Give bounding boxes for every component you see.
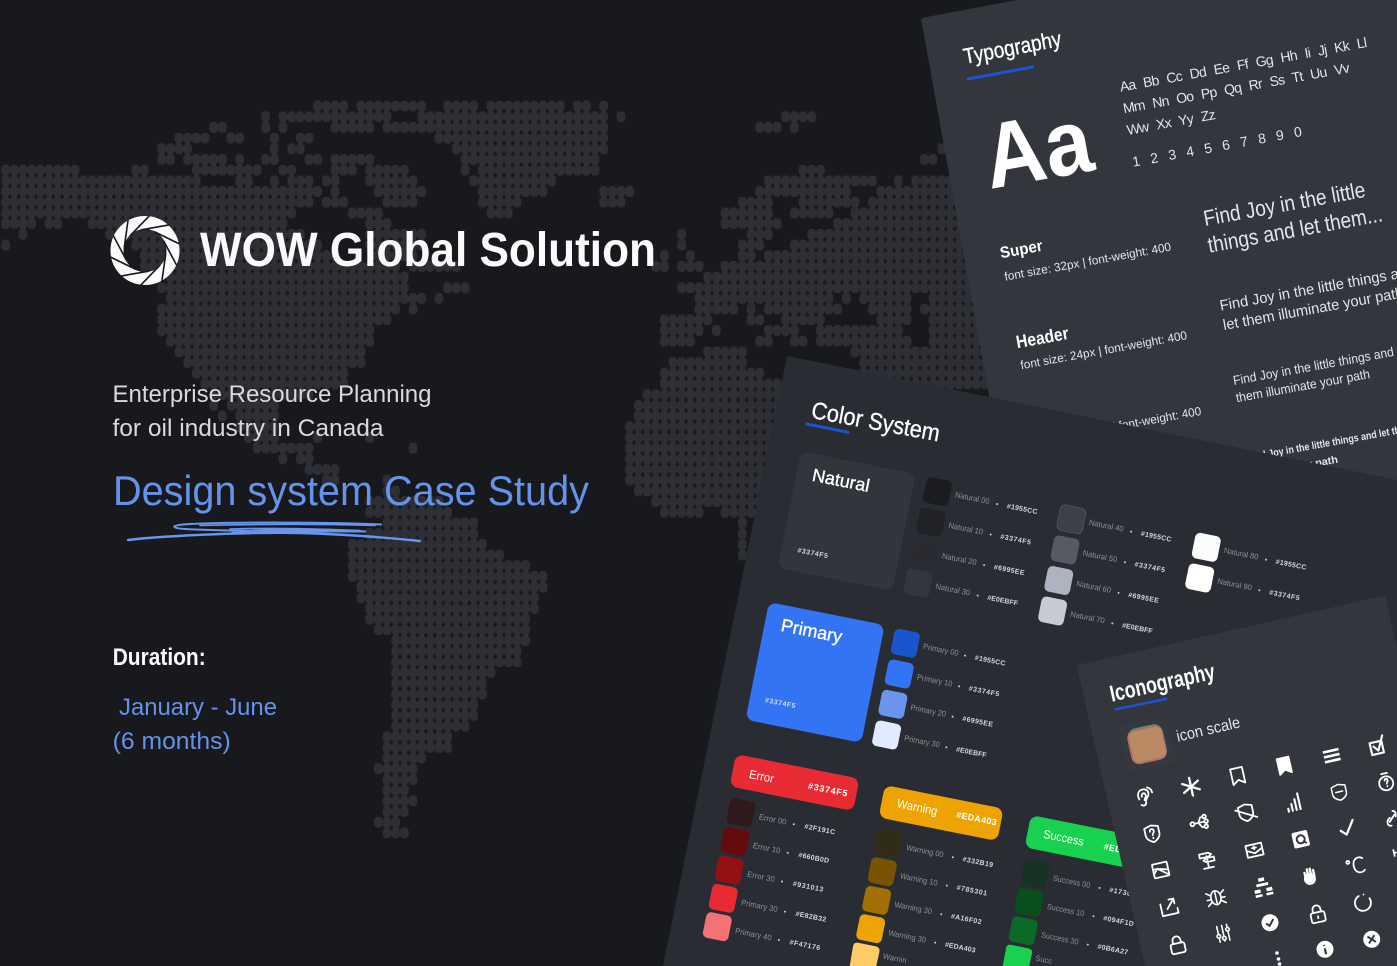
swatch: success 30 [1008,915,1131,964]
swatch: success 40 (cut by frame) [1003,945,1053,966]
swatch: natural 10: Natural 10 [948,521,984,537]
card: natural: Natural [811,465,871,496]
swatch: success 40 (cut by frame): Succ [1035,954,1053,966]
swatch: natural 90: Natural 90 [1217,577,1253,592]
swatch: natural 10: #3374F5 [1000,534,1032,547]
icon: lock [1169,935,1186,955]
swatch: warning 40 (cut by frame): Warnin [882,952,907,965]
swatch: success 10: Success 10 [1046,902,1086,918]
swatch: natural 40 [1056,504,1174,552]
sample text: small [1235,422,1397,484]
swatch: warning 10: Warning 10 [899,871,939,888]
icon: checkbox [1368,735,1386,755]
sample text: super: Find Joy in the little [1201,177,1367,231]
card: success: Success [1042,827,1085,849]
swatch: natural 40: Natural 40 [1088,518,1125,534]
card: error: #3374F5 [807,781,848,798]
swatch: error 10 [720,826,832,873]
icon: celsius [1346,857,1365,875]
icon: image [1152,862,1170,878]
icon scale swatch [1119,715,1176,773]
icon: link [1385,810,1397,826]
icon: bug [1206,889,1226,906]
swatch: warning 30 bright: #EDA403 [944,942,976,955]
subtitle: project description [112,381,432,442]
swatch: natural 60 [1044,565,1162,613]
swatch: natural 30: Natural 30 [935,582,971,598]
swatch: natural 70: Natural 70 [1069,610,1106,625]
swatch: success 30: #0B6A27 [1097,944,1129,957]
swatch: error 10: #660B0D [798,852,830,865]
icon: Q square [1291,830,1310,849]
alphabet specimen [1118,34,1368,170]
panel: color system [663,356,1397,966]
swatch: primary 00: #1955CC [974,655,1006,668]
swatch: warning 30: #A16F02 [950,913,982,926]
swatch: natural 60: #6995EE [1128,592,1160,605]
icon: keyed lock [1309,904,1326,924]
swatch: warning 30 [861,885,984,934]
duration value: January - June [119,694,277,721]
swatch: primary 10: #3374F5 [968,685,1000,698]
sample text: title [1232,344,1395,405]
panel: iconography [1077,596,1397,966]
scribble underline [128,523,420,541]
icon: close circle [1362,929,1382,949]
swatch: natural 20 [909,537,1027,585]
swatch: primary 30 red [708,883,829,932]
subtitle: project description: Enterprise Resource Planning [112,381,432,408]
card: warning: Warning [896,796,939,818]
title: company name: WOW Global Solution [200,224,656,277]
icon: menu lines [1323,749,1341,762]
icon: spinner [1353,893,1372,912]
swatch: primary 20: #6995EE [962,716,994,729]
swatch: natural 80: #1955CC [1275,559,1307,572]
swatch: primary 30 red: #E82B32 [795,911,827,924]
swatch: natural 00: Natural 00 [954,490,991,506]
swatch: primary 40 red: Primary 40 [734,926,773,943]
card: warning [879,785,1004,841]
icon: vertical dots [1275,951,1281,966]
icon: hand [1302,868,1317,886]
swatch: warning 30 bright: Warning 30 [888,928,927,945]
swatch: success 00 [1020,859,1143,908]
swatch: warning 30 bright [855,913,978,962]
card: warning: #EDA403 [955,810,998,827]
swatch: warning 30: Warning 30 [894,900,933,916]
icon: bookmark filled [1277,757,1292,775]
heading: typography: Typography [961,26,1063,69]
swatch: warning 10 [867,856,990,905]
icon scale label: icon scale [1175,714,1242,746]
swatch: primary 30: #E0EBFF [955,746,988,760]
swatch: error 00 [726,797,838,844]
swatch: primary 40 red: #F47176 [789,939,821,952]
sample text: small: illuminate your path [1235,454,1339,484]
card: error [730,754,860,811]
swatch: natural 10 [916,507,1034,555]
heading: design system case study: Design system Case Study [113,467,589,514]
card: primary: Primary [779,615,844,647]
swatch: natural 60: Natural 60 [1076,579,1112,595]
swatch: primary 30 red: Primary 30 [740,898,779,914]
style: title (partly hidden): font size: 16px | font-weight: 400 [1034,404,1203,448]
swatch: success 10: #094F1D [1103,915,1134,928]
swatch: natural 20: Natural 20 [941,551,978,567]
icon: signpost [1199,852,1216,869]
swatch: error 30: #931013 [792,881,824,894]
swatch: warning 00: #332B19 [962,856,994,869]
icon: asterisk [1181,776,1201,797]
heading underline [807,424,848,432]
icon: stopwatch [1377,772,1395,792]
swatch: natural 30: #E0EBFF [987,595,1019,608]
icon: export [1160,898,1179,916]
card: success: #EDA403 [1103,841,1145,859]
swatch: primary 20 [878,689,996,737]
icon: check [1339,820,1355,836]
swatch: primary 30 [871,720,990,768]
heading underline [1116,699,1166,709]
swatch: error 00: #2F191C [804,823,836,836]
swatch: warning 10: #785301 [956,885,988,898]
card: primary: #3374F5 [764,697,796,710]
swatch: natural 90: #3374F5 [1268,589,1300,602]
icon: ear [1137,787,1155,806]
sample text: title: them illuminate your path [1235,366,1371,405]
swatch: natural 00 [922,476,1040,524]
swatch: primary 10: Primary 10 [916,673,954,689]
swatch: success 10 [1014,887,1136,936]
icon: mail plus [1245,843,1264,858]
duration value [113,694,277,755]
heading underline [968,67,1033,79]
card: success [1025,815,1150,871]
swatch: error 10: Error 10 [752,841,782,855]
swatch: error 30: Error 30 [746,870,776,884]
swatch: primary 40 red [702,911,823,960]
card: primary [745,602,885,743]
swatch: success 00: Success 00 [1052,874,1092,890]
swatch: natural 50: Natural 50 [1082,549,1119,564]
style: title (partly hidden): Title [1031,409,1066,432]
swatch: primary 00: Primary 00 [922,642,960,658]
swatch: natural 70 [1037,596,1156,644]
duration label: Duration: [113,644,206,671]
swatch: success 30: Success 30 [1040,930,1080,947]
big Aa specimen: Aa [975,89,1101,209]
style: super: Super [999,238,1044,262]
swatch: natural 20: #6995EE [993,564,1025,577]
swatch: natural 80: Natural 80 [1223,546,1260,562]
swatch: primary 10 [884,659,1002,707]
heading: color system: Color System [809,397,942,447]
swatch: error 30 [714,855,826,902]
card: natural: #3374F5 [797,547,829,560]
swatch: primary 00 [890,628,1008,676]
swatch: natural 80 [1191,532,1309,580]
icon: usb [1189,814,1209,831]
icon: bookmark outline [1230,767,1245,785]
card: natural [778,451,916,591]
alphabet specimen: 1 2 3 4 5 6 7 8 9 0 [1131,123,1303,170]
swatch: natural 90 [1184,563,1302,611]
subtitle: project description: for oil industry in Canada [112,415,384,442]
panel: typography [921,0,1397,500]
icon: shield badge [1331,783,1348,802]
swatch: warning 00 [873,828,996,877]
swatch: primary 20: Primary 20 [910,703,947,719]
icon: shield question [1144,824,1161,844]
style: super: font size: 32px | font-weight: 400 [1003,240,1172,284]
swatch: natural 50 [1050,535,1168,583]
icon: sliders [1215,924,1232,943]
style: header: Header [1014,323,1070,352]
alphabet specimen: Mm Nn Oo Pp Qq Rr Ss Tt Uu Vv [1122,59,1351,116]
heading: iconography: Iconography [1107,658,1217,707]
alphabet specimen: Ww Xx Yy Zz [1125,106,1217,138]
icon: hierarchy [1252,876,1274,898]
icon: signal bars [1285,793,1301,812]
swatch: natural 40: #1955CC [1140,531,1172,544]
swatch: success 00: #173023 [1109,887,1140,900]
alphabet specimen: Aa Bb Cc Dd Ee Ff Gg Hh Ii Jj Kk Ll [1118,34,1368,95]
card: error: Error [748,767,775,786]
swatch: natural 30 [903,568,1021,616]
swatch: natural 00: #1955CC [1006,503,1038,516]
icon: shield off [1234,802,1258,823]
icon: info circle [1315,939,1335,959]
logo: aperture ring [111,216,179,285]
swatch: warning 40 (cut by frame) [850,943,907,966]
icon: cropped glyph [1393,850,1397,856]
dotted world map background [1,101,1007,838]
swatch: primary 30: Primary 30 [903,734,941,750]
swatch: error 00: Error 00 [758,812,788,827]
swatch: natural 50: #3374F5 [1134,561,1166,574]
style: header: font size: 24px | font-weight: 400 [1019,328,1188,372]
duration value: (6 months) [113,728,231,755]
icon: check circle [1260,913,1280,933]
swatch: natural 70: #E0EBFF [1121,622,1154,636]
swatch: warning 00: Warning 00 [905,843,945,859]
